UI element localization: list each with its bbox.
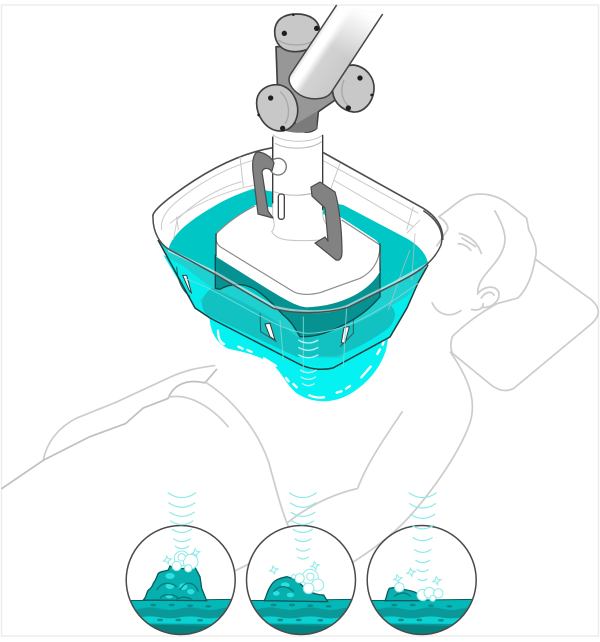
waves 2 [289,493,317,559]
bowl inner back lines [161,156,418,230]
bowl inner faint lines [185,278,418,373]
patient outline [2,194,598,574]
waves 1 [168,493,196,549]
circle 3: reduced lesion [366,492,477,636]
top cap [275,13,319,52]
eye [458,233,481,253]
transducer white body [216,205,381,307]
bowl interior outlines [170,185,420,310]
chest to elbow [228,538,294,574]
left cap [257,85,298,131]
bowl clips [183,275,349,343]
robot arm [257,5,383,241]
far shoulder and arm [332,352,472,574]
process circles [120,493,494,640]
column [270,135,335,241]
upper shoulder [43,366,215,460]
applicator bowl with water [153,185,442,386]
gel dashes [218,331,384,398]
bowl lower edge [158,240,428,369]
ear [477,287,499,308]
right cap [333,65,374,112]
waves 3 [409,493,437,581]
left handle [253,152,274,218]
transducer dark underside [215,255,380,337]
head [439,194,536,353]
column side knob [270,158,286,175]
bowl back rim [153,148,443,240]
joint body [276,27,353,132]
water top surface [168,188,428,312]
clip housings [177,267,353,347]
inner arm [288,412,402,522]
collar and arm line [2,369,216,489]
clavicle [168,396,228,427]
gel pad on skin [209,317,388,401]
pillow [452,259,598,391]
arm tube [289,5,383,99]
bright bowl bottom [163,255,418,368]
face [432,211,505,315]
ultrasound beam in bowl [298,340,318,386]
circle 1: intact lesion [125,492,236,636]
column slot [278,194,284,219]
gripper handles [253,152,342,260]
right handle [311,182,342,260]
bowl rim front [168,250,427,312]
inner lens shape [202,288,395,357]
circle 2: partial lesion [246,492,356,636]
water side volume [158,240,428,368]
torso edge [205,382,294,538]
